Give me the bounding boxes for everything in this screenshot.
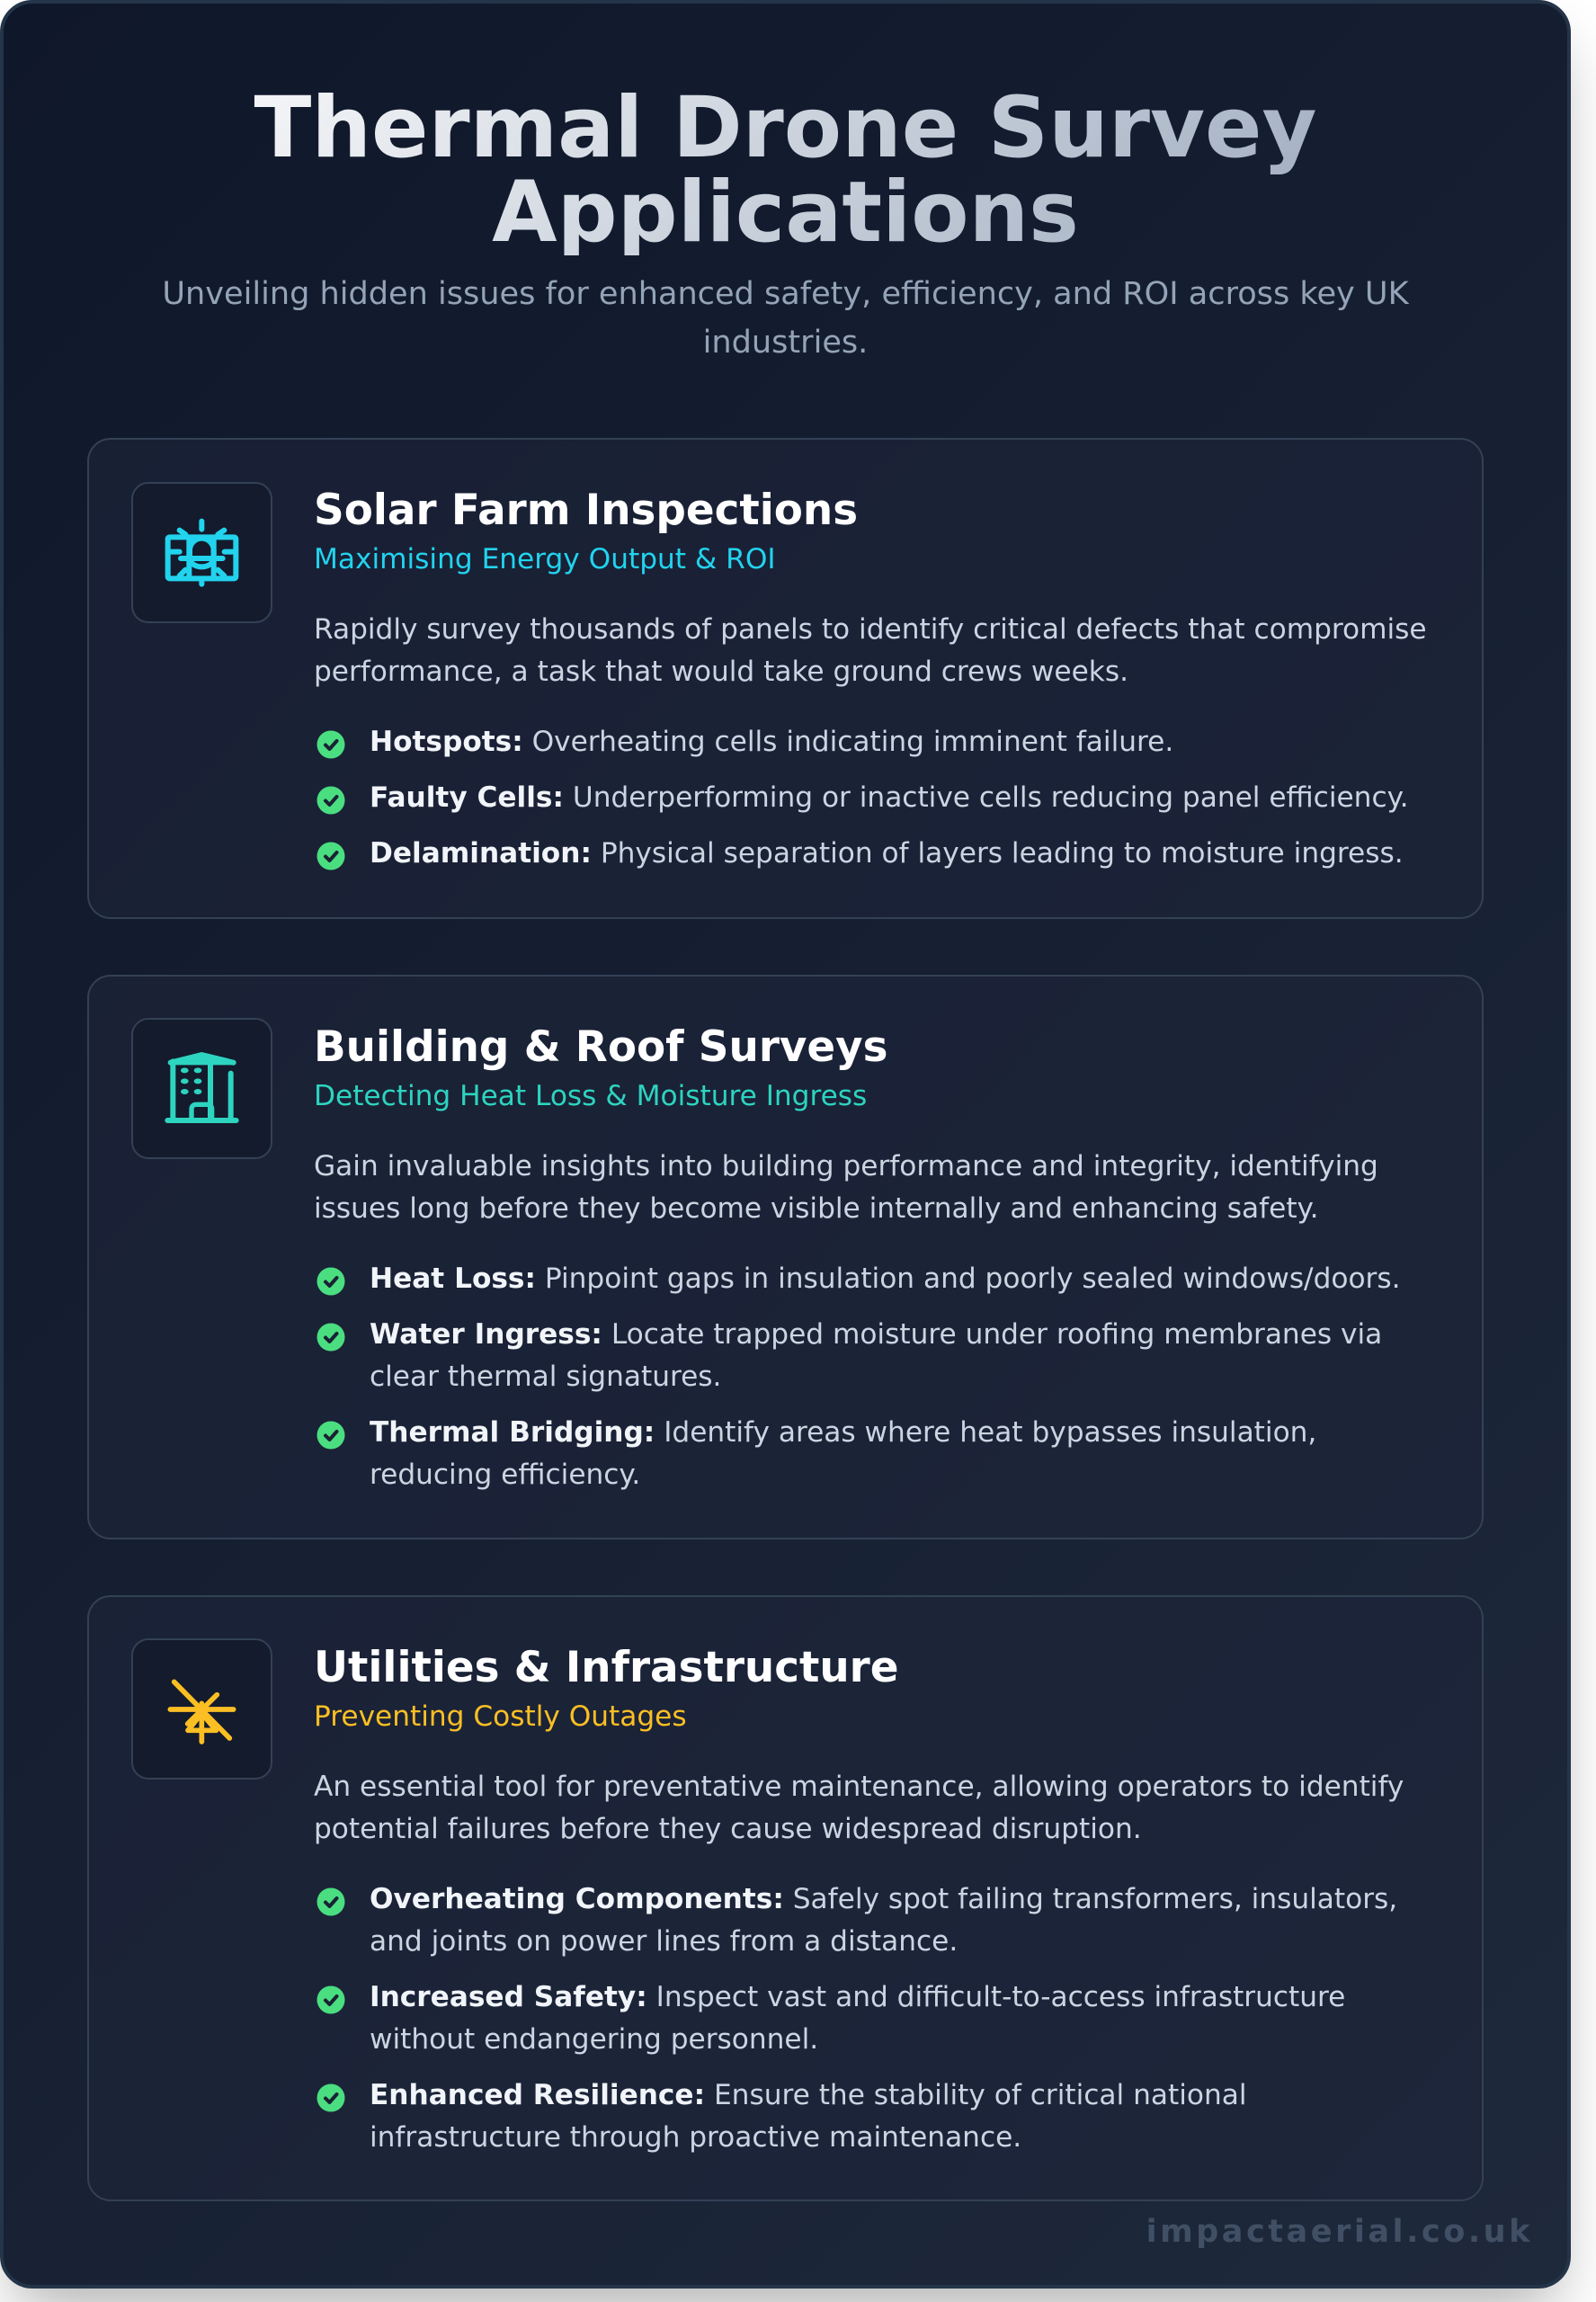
solar description: Rapidly survey thousands of panels to identify critical defects that compromise [314,613,1427,646]
bullet: hotspots: Hotspots: Overheating cells indicating imminent failure. [370,726,1173,758]
bullet: thermal bridging [370,1416,1316,1491]
solar description: performance, a task that would take ground crews weeks. [314,656,1128,688]
bullet: overheating components: Overheating Components: Safely spot failing transformers, insulators, [370,1883,1397,1915]
panel: utilities card [87,1595,1484,2201]
watermark: impactaerial.co.uk [1146,2213,1533,2250]
utilities description [314,1771,1404,1845]
check icon [317,730,345,759]
bullet: overheating components: and joints on power lines from a distance. [370,1925,958,1958]
bullet: enhanced resilience: Enhanced Resilience: Ensure the stability of critical national [370,2079,1247,2111]
building tagline: Detecting Heat Loss & Moisture Ingress [314,1080,867,1112]
check icon [317,842,345,870]
bullet: increased safety: Increased Safety: Inspect vast and difficult-to-access infrastructure [370,1981,1345,2013]
check icon [317,2084,345,2111]
bullet: increased safety [370,1981,1345,2056]
check icon [317,786,345,815]
utilities tagline: Preventing Costly Outages [314,1700,687,1733]
title: Applications [492,164,1079,262]
building description: Gain invaluable insights into building performance and integrity, identifying [314,1150,1378,1182]
check icon [317,1268,345,1295]
bullet: increased safety: without endangering personnel. [370,2023,818,2056]
solar tagline: Maximising Energy Output & ROI [314,543,776,576]
icon: building [131,1018,272,1159]
solar description [314,613,1427,688]
subtitle [162,275,1410,361]
bullet: enhanced resilience [370,2079,1247,2154]
bullet: thermal bridging: reducing efficiency. [370,1459,640,1491]
title [88,86,1483,255]
icon: solar panel [131,482,272,623]
check icon [317,1985,345,2014]
building description [314,1150,1378,1225]
icon: power line [131,1638,272,1780]
bullet: enhanced resilience: infrastructure through proactive maintenance. [370,2121,1021,2154]
check icon [317,1324,345,1351]
subtitle: industries. [703,324,868,361]
bullet: water ingress: clear thermal signatures. [370,1361,721,1393]
bullet: faulty cells: Faulty Cells: Underperforming or inactive cells reducing panel efficiency. [370,781,1409,814]
title: Thermal Drone Survey [254,79,1316,177]
check icon [317,1888,345,1915]
utilities description: potential failures before they cause widespread disruption. [314,1813,1142,1845]
subtitle: Unveiling hidden issues for enhanced safety, efficiency, and ROI across key UK [162,275,1409,312]
bullet: delamination: Delamination: Physical separation of layers leading to moisture ingress. [370,837,1404,870]
bullet: water ingress: Water Ingress: Locate trapped moisture under roofing membranes via [370,1318,1382,1351]
bullet: overheating components [370,1883,1397,1958]
utilities description: An essential tool for preventative maintenance, allowing operators to identify [314,1771,1404,1803]
check icon [317,1421,345,1450]
panel: building card [87,975,1484,1539]
building description: issues long before they become visible internally and enhancing safety. [314,1192,1318,1225]
panel: solar farm card [87,438,1484,919]
bullet: water ingress [370,1318,1382,1393]
bullet: thermal bridging: Thermal Bridging: Identify areas where heat bypasses insulation, [370,1416,1316,1449]
solar heading: Solar Farm Inspections [314,486,858,535]
building heading: Building & Roof Surveys [314,1023,888,1072]
utilities heading: Utilities & Infrastructure [314,1644,899,1692]
bullet: heat loss: Heat Loss: Pinpoint gaps in insulation and poorly sealed windows/doors. [370,1263,1401,1295]
